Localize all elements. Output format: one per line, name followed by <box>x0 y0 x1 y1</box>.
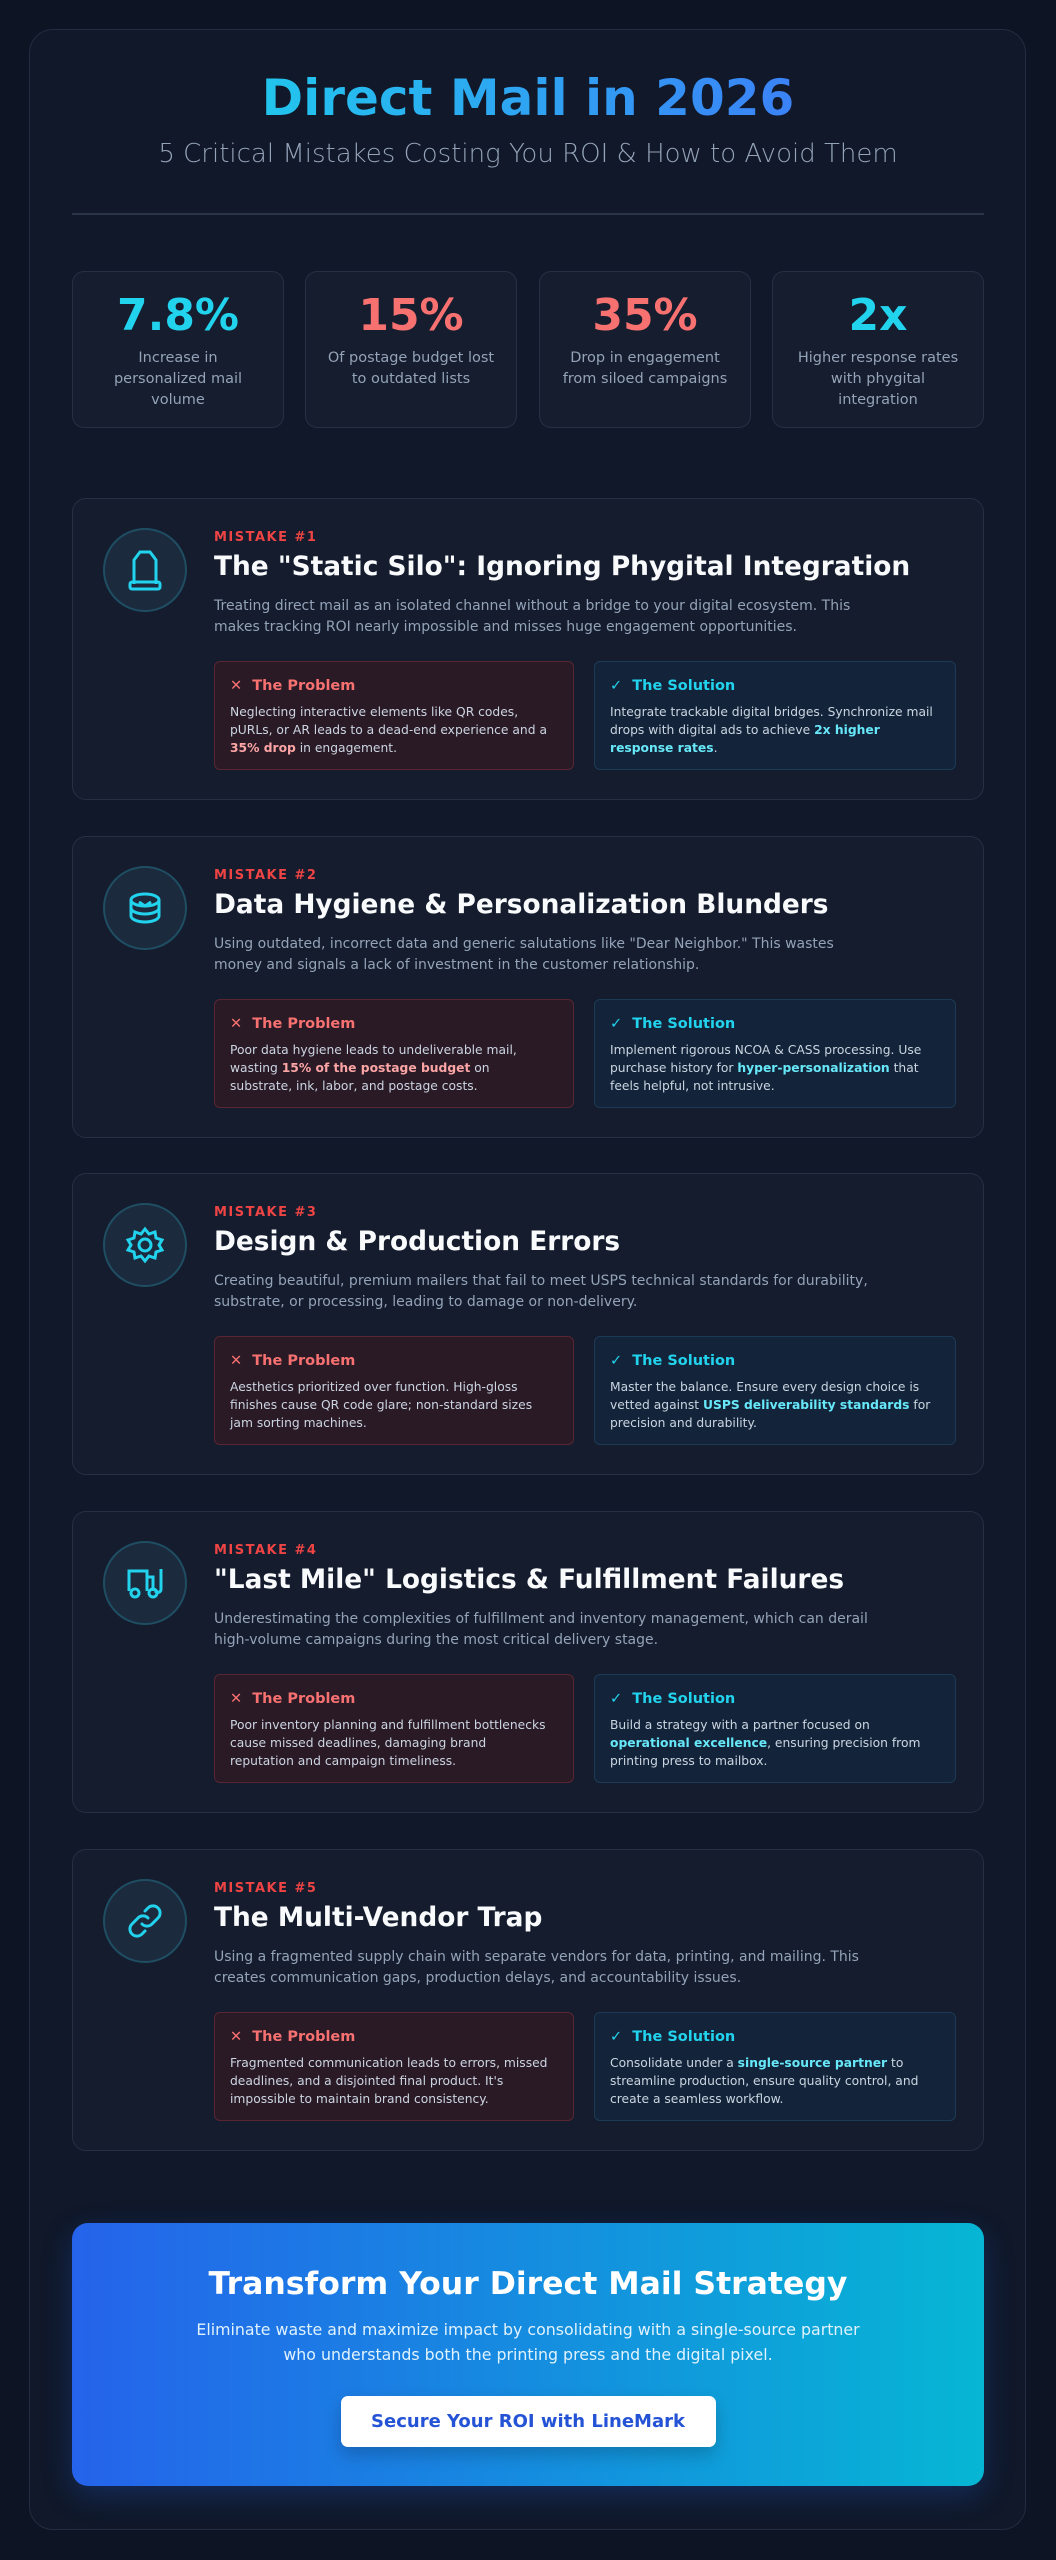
icon: gear <box>103 1203 187 1287</box>
problem box <box>214 2012 574 2121</box>
solution box: Integrate trackable digital bridges. Synchronize mail drops with digital ads to achieve 2x higher response rates. <box>610 705 933 755</box>
solution box: ✓ The Solution <box>610 2029 735 2045</box>
problem box <box>214 1674 574 1783</box>
icon: database <box>103 866 187 950</box>
label: MISTAKE #5 <box>214 1881 317 1896</box>
heading: Design & Production Errors <box>214 1226 620 1257</box>
description: Using a fragmented supply chain with separate vendors for data, printing, and mailing. This creates communication gaps, production delays, and accountability issues. <box>214 1949 859 1986</box>
heading: "Last Mile" Logistics & Fulfillment Failures <box>214 1564 844 1595</box>
panel: mistake 3 <box>72 1173 984 1475</box>
stat: 35%: 35% <box>592 290 698 341</box>
problem box: ✕ The Problem <box>230 1691 355 1707</box>
panel: mistake 1 <box>72 498 984 800</box>
label: MISTAKE #2 <box>214 868 317 883</box>
solution box <box>594 2012 956 2121</box>
icon: truck <box>103 1541 187 1625</box>
stat: 2x: Higher response rates with phygital integration <box>798 350 958 408</box>
problem box: Neglecting interactive elements like QR codes, pURLs, or AR leads to a dead-end experience and a 35% drop in engagement. <box>230 705 547 755</box>
CTA button <box>340 2396 716 2447</box>
label: MISTAKE #4 <box>214 1543 317 1558</box>
solution box: Build a strategy with a partner focused on operational excellence, ensuring precision from printing press to mailbox. <box>610 1718 920 1768</box>
label: MISTAKE #3 <box>214 1205 317 1220</box>
problem box: Fragmented communication leads to errors, missed deadlines, and a disjointed final product. It's impossible to maintain brand consistency. <box>230 2056 548 2106</box>
stat: 35%: Drop in engagement from siloed campaigns <box>563 350 727 387</box>
problem box: Poor data hygiene leads to undeliverable mail, wasting 15% of the postage budget on substrate, ink, labor, and postage costs. <box>230 1043 517 1093</box>
problem box: ✕ The Problem <box>230 2029 355 2045</box>
stat: 15% <box>305 271 517 428</box>
problem box: ✕ The Problem <box>230 1353 355 1369</box>
solution box: ✓ The Solution <box>610 1016 735 1032</box>
solution box: ✓ The Solution <box>610 1691 735 1707</box>
stat: 15%: 15% <box>358 290 464 341</box>
label: MISTAKE #1 <box>214 530 317 545</box>
panel: mistake 5 <box>72 1849 984 2151</box>
problem box: Poor inventory planning and fulfillment bottlenecks cause missed deadlines, damaging brand reputation and campaign timeliness. <box>230 1718 546 1768</box>
solution box <box>594 999 956 1108</box>
solution box: Consolidate under a single-source partner to streamline production, ensure quality control, and create a seamless workflow. <box>610 2056 918 2106</box>
solution box <box>594 661 956 770</box>
description: Treating direct mail as an isolated channel without a bridge to your digital ecosystem. This makes tracking ROI nearly impossible and misses huge engagement opportunities. <box>214 598 850 635</box>
stat: 7.8%: Increase in personalized mail volume <box>114 350 242 408</box>
solution box <box>594 1336 956 1445</box>
stat: 7.8% <box>72 271 284 428</box>
icon: link <box>103 1879 187 1963</box>
icon: device <box>103 528 187 612</box>
description: Underestimating the complexities of fulfillment and inventory management, which can derail high-volume campaigns during the most critical delivery stage. <box>214 1611 868 1648</box>
problem box <box>214 1336 574 1445</box>
panel: mistake 2 <box>72 836 984 1138</box>
heading: The Multi-Vendor Trap <box>214 1902 542 1933</box>
heading: The "Static Silo": Ignoring Phygital Integration <box>214 551 910 582</box>
subtitle: 5 Critical Mistakes Costing You ROI & How to Avoid Them <box>158 139 898 169</box>
description: Using outdated, incorrect data and generic salutations like "Dear Neighbor." This wastes money and signals a lack of investment in the customer relationship. <box>214 936 834 973</box>
solution box <box>594 1674 956 1783</box>
stat: 2x: 2x <box>848 290 908 341</box>
heading: Data Hygiene & Personalization Blunders <box>214 889 828 920</box>
solution box: ✓ The Solution <box>610 1353 735 1369</box>
problem box: Aesthetics prioritized over function. High-gloss finishes cause QR code glare; non-standard sizes jam sorting machines. <box>230 1380 532 1430</box>
CTA button: Secure Your ROI with LineMark <box>371 2411 685 2432</box>
panel: mistake 4 <box>72 1511 984 1813</box>
CTA heading: Transform Your Direct Mail Strategy <box>209 2266 847 2302</box>
solution box: Master the balance. Ensure every design choice is vetted against USPS deliverability standards for precision and durability. <box>610 1380 930 1430</box>
solution box: ✓ The Solution <box>610 678 735 694</box>
stat: 2x <box>772 271 984 428</box>
stat: 35% <box>539 271 751 428</box>
CTA text: Eliminate waste and maximize impact by consolidating with a single-source partner who understands both the printing press and the digital pixel. <box>196 2320 860 2364</box>
callout: CTA <box>72 2223 984 2486</box>
stat: 7.8%: 7.8% <box>117 290 239 341</box>
problem box: ✕ The Problem <box>230 678 355 694</box>
problem box <box>214 661 574 770</box>
problem box <box>214 999 574 1108</box>
problem box: ✕ The Problem <box>230 1016 355 1032</box>
description: Creating beautiful, premium mailers that fail to meet USPS technical standards for durability, substrate, or processing, leading to damage or non-delivery. <box>214 1273 868 1310</box>
solution box: Implement rigorous NCOA & CASS processing. Use purchase history for hyper-personalization that feels helpful, not intrusive. <box>610 1043 921 1093</box>
title: Direct Mail in 2026 <box>262 69 794 127</box>
stat: 15%: Of postage budget lost to outdated lists <box>328 350 494 387</box>
